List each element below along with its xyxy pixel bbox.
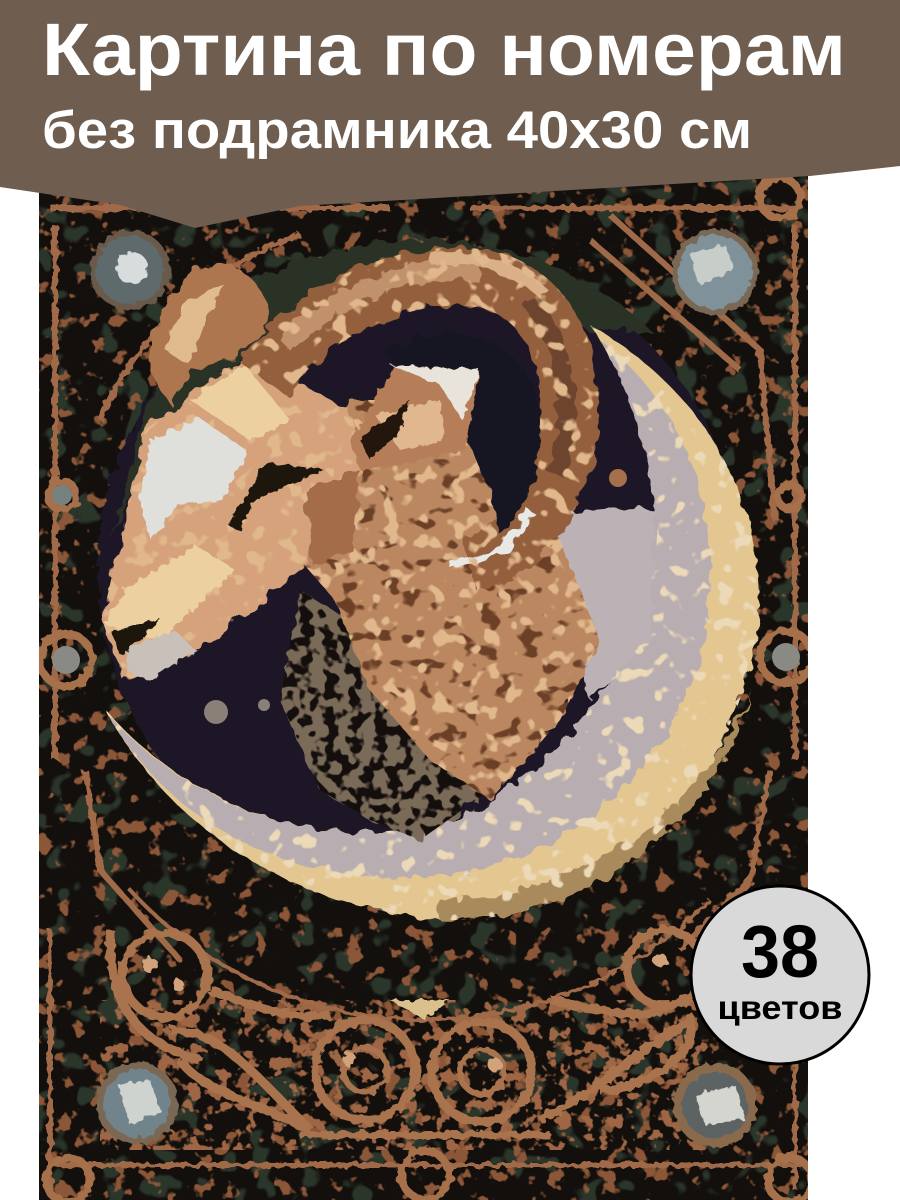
horn ring texture	[230, 240, 600, 590]
beard and chest	[280, 590, 482, 842]
subtitle: без подрамника 40х30 см	[42, 101, 752, 160]
dense copper scrollwork texture	[100, 1000, 720, 1150]
forehead white blaze	[140, 418, 248, 540]
small jewel left side	[52, 485, 72, 505]
body light fur texture	[306, 400, 597, 786]
back horn	[150, 265, 268, 405]
eye	[228, 462, 325, 530]
side jewel left	[52, 646, 80, 674]
crescent moon	[100, 320, 770, 930]
jewel top left	[90, 230, 170, 310]
mouth	[125, 630, 195, 680]
jewel bottom left	[96, 1062, 178, 1144]
side jewel right	[772, 643, 800, 671]
copper mottling	[39, 176, 808, 1200]
jewel top right	[672, 229, 758, 315]
large curled horn	[230, 240, 600, 590]
dark sky disc	[96, 303, 718, 836]
small moon stones	[204, 469, 627, 724]
badge number: 38	[741, 910, 819, 993]
ear	[350, 365, 480, 470]
painting background	[39, 176, 808, 1200]
beard dark texture	[280, 590, 482, 837]
grey sky patch behind neck	[558, 505, 656, 702]
jewel bottom right	[673, 1063, 757, 1147]
ornament area texture	[39, 176, 808, 1200]
ram neck and body	[304, 398, 600, 802]
head light texture	[104, 367, 356, 680]
inner dark horn hole	[466, 406, 541, 534]
header banner	[0, 0, 900, 228]
cream forehead	[190, 365, 290, 440]
ram head	[100, 350, 370, 690]
title: Картина по номерам	[42, 8, 846, 91]
cream nose	[105, 545, 235, 640]
bottom scroll ornaments	[110, 930, 703, 1135]
badge label: цветов	[718, 989, 842, 1026]
green mottling	[39, 176, 808, 1200]
cheek shadow	[305, 470, 360, 565]
bottom ornament highlights	[142, 953, 667, 1072]
body dark fur texture	[306, 400, 598, 799]
green tones top of disc	[110, 240, 650, 540]
painting	[39, 176, 812, 1200]
crescent cream mottling	[100, 320, 770, 930]
badge: 38 colours	[691, 886, 869, 1064]
side copper ornaments	[40, 178, 812, 1200]
ornamental frame lines	[50, 208, 800, 1190]
